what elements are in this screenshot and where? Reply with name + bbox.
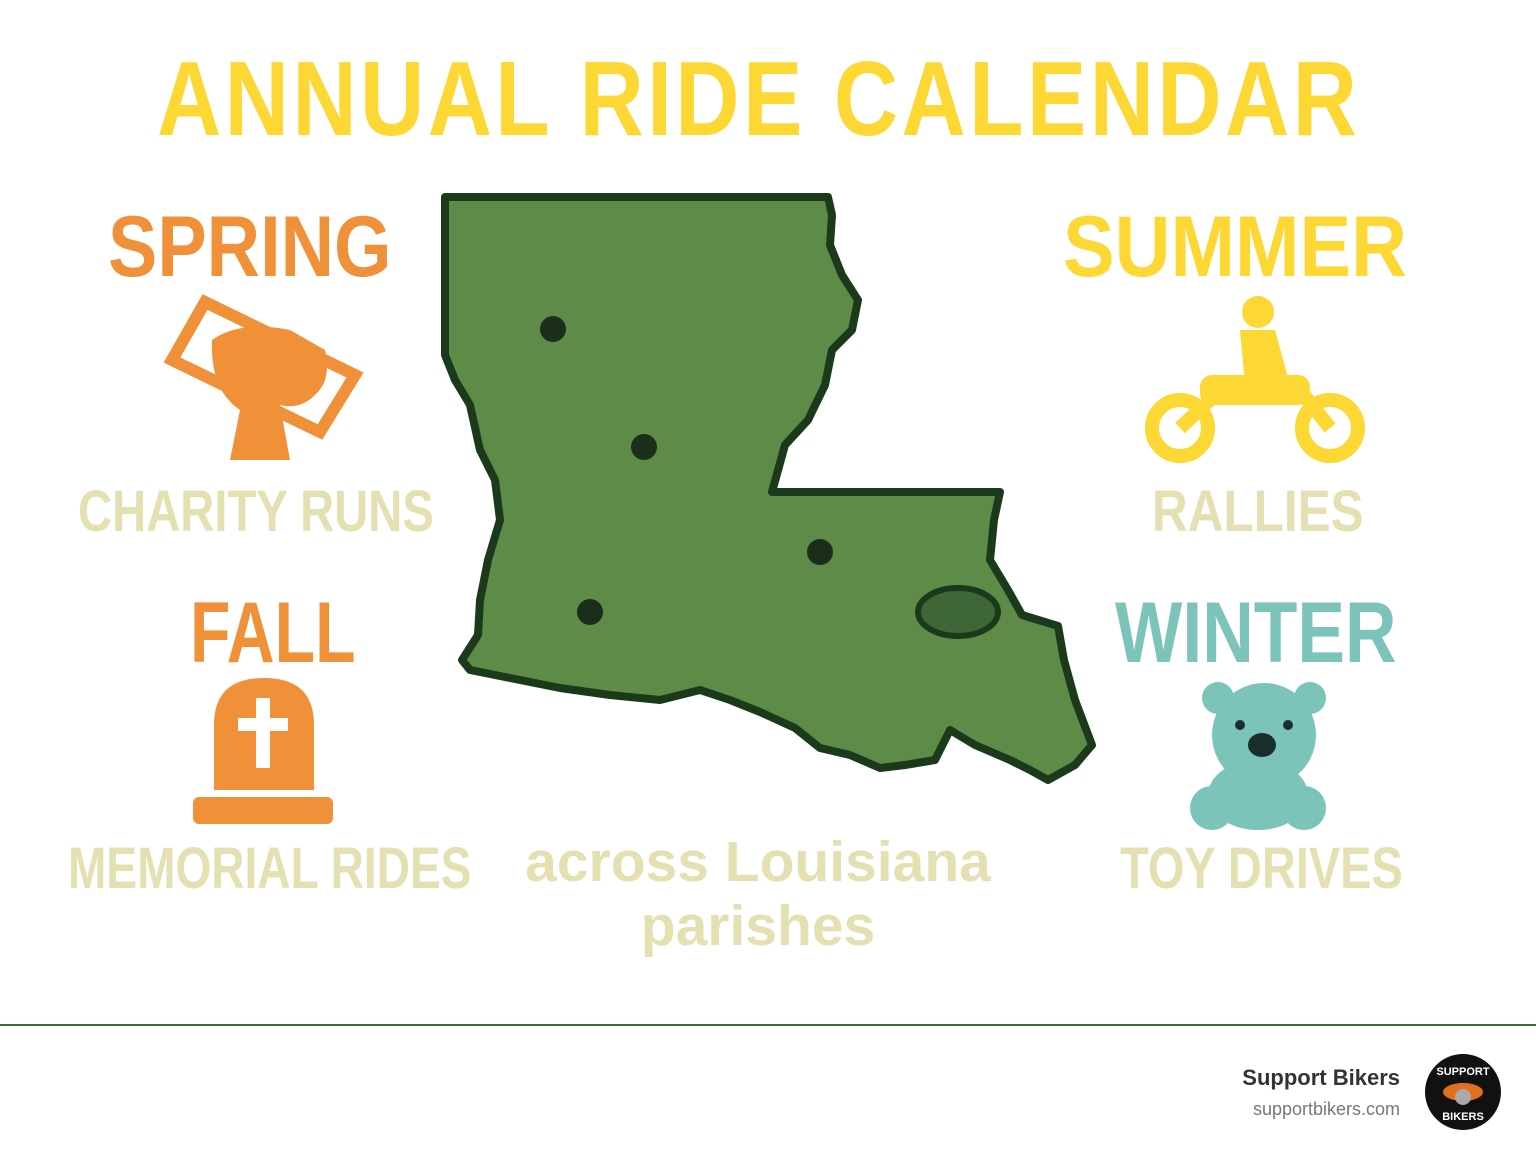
- footer brand text: [1242, 1065, 1400, 1119]
- icon: tombstone: [193, 678, 333, 824]
- heading: spring: SPRING: [108, 199, 392, 295]
- label: charity runs: CHARITY RUNS: [78, 479, 434, 544]
- label: rallies: RALLIES: [1152, 479, 1364, 544]
- label: memorial rides: MEMORIAL RIDES: [68, 836, 471, 901]
- label: across louisiana parishes: across Louisiana: [525, 830, 991, 894]
- icon: motorcycle: [1152, 390, 1358, 456]
- city dots: [540, 316, 833, 625]
- label: across louisiana parishes: parishes: [641, 894, 875, 958]
- icon: teddy bear: [1190, 682, 1326, 830]
- heading: fall: FALL: [190, 585, 356, 681]
- divider: [0, 1024, 1536, 1026]
- logo: BIKERS: [1442, 1111, 1484, 1123]
- label: toy drives: TOY DRIVES: [1120, 836, 1403, 901]
- title: ANNUAL RIDE CALENDAR: [157, 40, 1360, 158]
- heading: winter: WINTER: [1115, 585, 1397, 681]
- footer brand text: supportbikers.com: [1253, 1099, 1400, 1119]
- heading: summer: SUMMER: [1063, 199, 1407, 295]
- label: across louisiana parishes: [525, 830, 992, 958]
- logo: SUPPORT: [1436, 1066, 1490, 1078]
- logo: [1425, 1054, 1501, 1130]
- icon: fist with sign: [172, 302, 355, 460]
- footer brand text: Support Bikers: [1242, 1065, 1400, 1090]
- lake: [918, 588, 998, 636]
